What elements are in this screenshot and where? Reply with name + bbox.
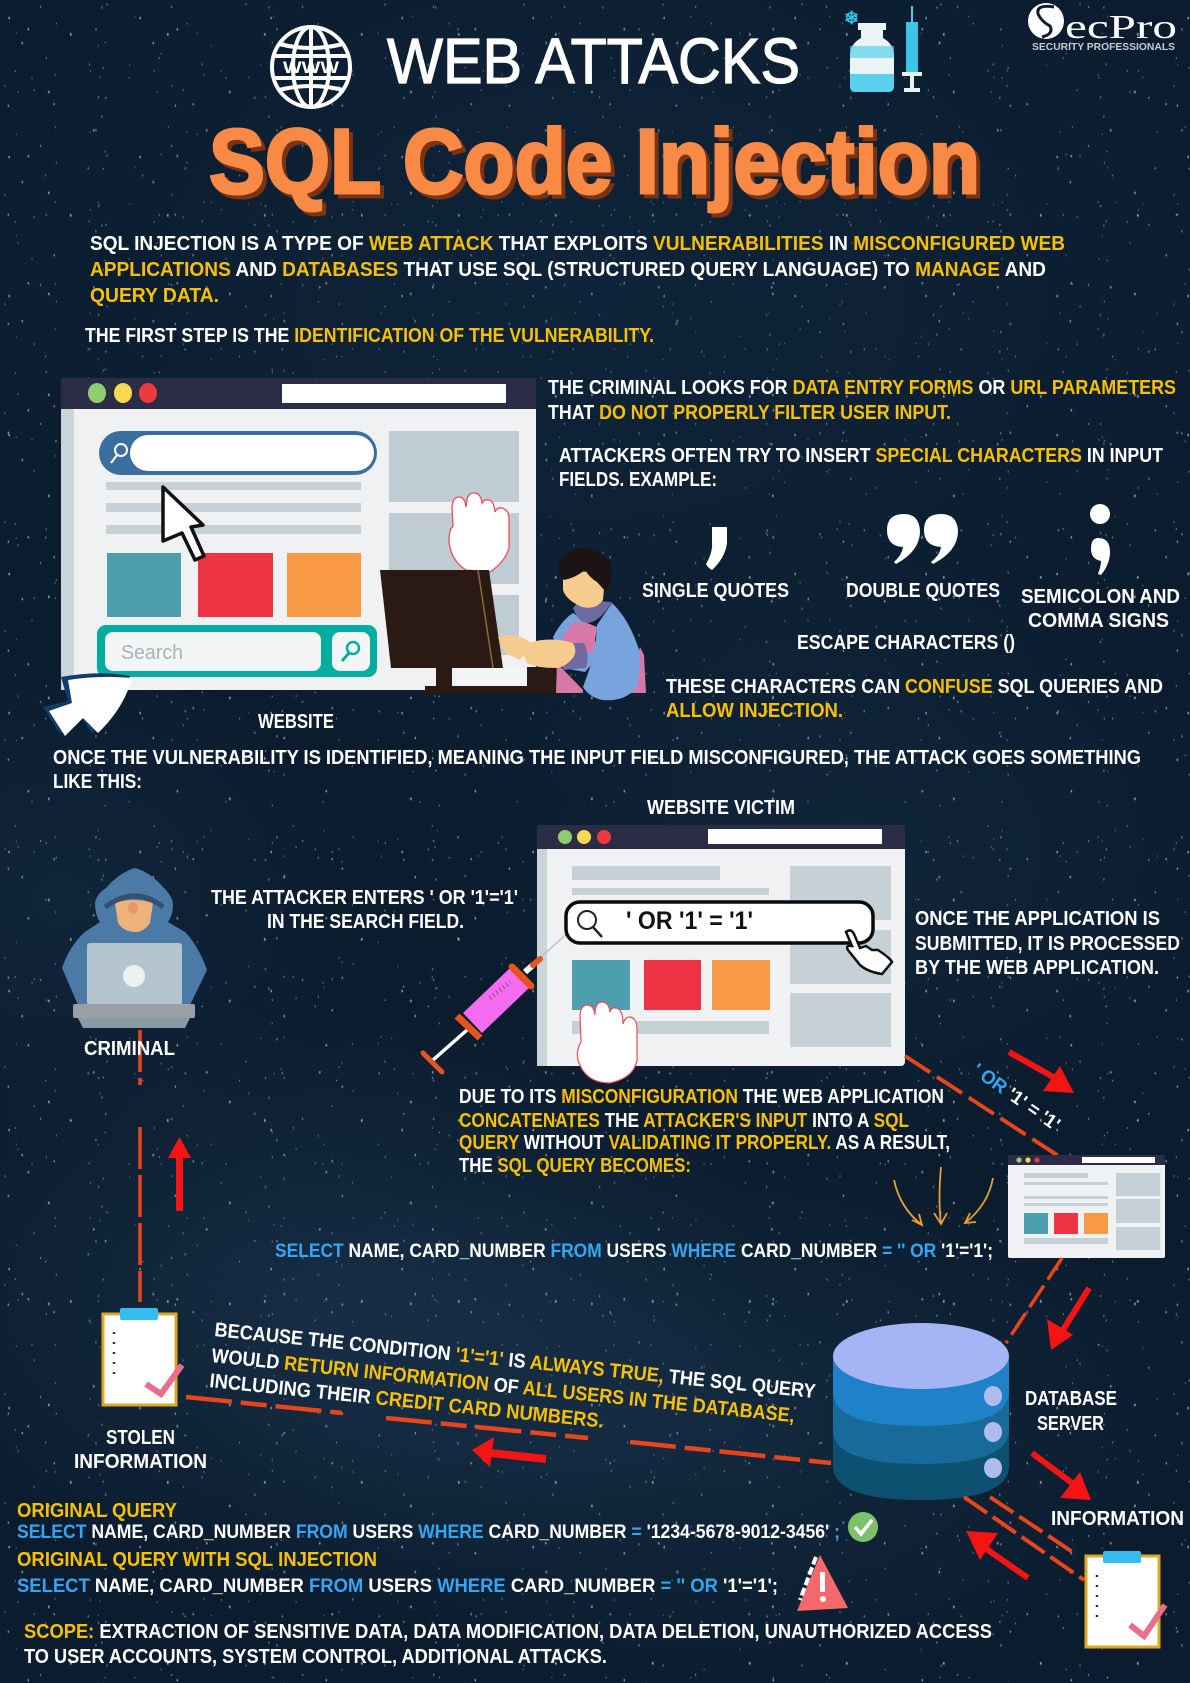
icon: white fang shape [43,673,132,736]
text block: once vulnerability identified: LIKE THIS: [53,771,142,793]
text block: intro: QUERY DATA. [90,285,219,307]
logo: SecPro [1028,3,1177,53]
text: original query [17,1500,840,1543]
connector: dashed line criminal to stolen info [138,1030,142,1302]
icon: vial and syringe [844,6,922,92]
teal search box [97,625,377,677]
text block: confuse SQL: THESE CHARACTERS CAN CONFUSE SQL QUERIES AND [666,676,1163,698]
text: misconfiguration: CONCATENATES THE ATTACKER'S INPUT INTO A SQL [459,1110,909,1132]
text block: attackers insert characters: ATTACKERS OFTEN TRY TO INSERT SPECIAL CHARACTERS IN INPUT [559,445,1163,467]
label: semicolon and comma signs [1021,586,1180,632]
text: condition always true: WOULD RETURN INFORMATION OF ALL USERS IN THE DATABASE, [210,1345,796,1427]
connector: dashed lines database to information [964,1497,1084,1580]
text: misconfiguration: DUE TO ITS MISCONFIGURATION THE WEB APPLICATION [459,1086,944,1108]
text: injected query [17,1549,778,1597]
icon: warning triangle [797,1555,848,1611]
text: injected query: ORIGINAL QUERY WITH SQL INJECTION [17,1549,377,1571]
arrow: red up left [966,1531,1028,1578]
monitor [380,570,565,694]
text: misconfiguration [459,1086,950,1177]
label: database server: DATABASE [1025,1388,1117,1410]
text block: confuse SQL [666,676,1163,722]
text: condition always true: BECAUSE THE CONDITION '1'='1' IS ALWAYS TRUE, THE SQL QUERY [213,1319,817,1403]
arrow: red down right [1009,1052,1074,1093]
text block: scope: SCOPE: EXTRACTION OF SENSITIVE DATA, DATA MODIFICATION, DATA DELETION, UNAUTHORIZED ACCESS [24,1621,992,1643]
arrow: red down right to information [1032,1453,1091,1500]
arrow: red up [168,1137,191,1211]
text: first step: THE FIRST STEP IS THE IDENTIFICATION OF THE VULNERABILITY. [85,325,654,347]
logo: SecPro: SECURITY PROFESSIONALS [1032,42,1175,53]
icon: green check [848,1512,878,1542]
text block: criminal looks: THAT DO NOT PROPERLY FILTER USER INPUT. [548,402,951,424]
connector: dashed line server to database [1006,1258,1062,1343]
icon: double quote glyph [887,514,958,564]
icon: www globe [272,27,350,107]
icon: single quote glyph [706,527,727,570]
search field with injection text: ' OR '1' = '1' [626,907,753,935]
text: original query: SELECT NAME, CARD_NUMBER FROM USERS WHERE CARD_NUMBER = '1234-5678-9012-3456' ; [17,1522,840,1543]
icon: syringe [423,928,573,1072]
illustration: small browser window [1008,1155,1165,1258]
icon: database server [833,1323,1009,1500]
text block: criminal looks [548,377,1176,424]
label: criminal: CRIMINAL [84,1038,175,1060]
text: once submitted: ONCE THE APPLICATION IS [915,908,1160,930]
label: stolen information [74,1427,207,1473]
text block: scope: TO USER ACCOUNTS, SYSTEM CONTROL, ADDITIONAL ATTACKS. [24,1646,607,1668]
text block: intro [90,233,1065,307]
text: misconfiguration: THE SQL QUERY BECOMES: [459,1155,691,1177]
label: stolen information: INFORMATION [74,1451,207,1473]
text: condition always true: INCLUDING THEIR CREDIT CARD NUMBERS. [208,1370,605,1433]
icon: information clipboard [1086,1551,1165,1647]
label: information: INFORMATION [1051,1508,1184,1530]
label: semicolon and comma signs: SEMICOLON AND [1021,586,1180,608]
label: escape characters: ESCAPE CHARACTERS () [797,632,1015,654]
title: SQL Code Injection: SQL Code Injection [209,111,980,213]
icon: orange pointer arrows [894,1167,993,1225]
illustration: person at computer [380,548,646,700]
arrow: red down left [1047,1288,1089,1350]
text: injected query: SELECT NAME, CARD_NUMBER FROM USERS WHERE CARD_NUMBER = '' OR '1'='1'; [17,1576,778,1597]
label: database server [1025,1388,1117,1435]
icon: pointing hand cursor [846,930,892,974]
text block: attackers insert characters [559,445,1163,491]
icon: vial and syringe: ❄ [844,8,859,28]
label: stolen information: STOLEN [106,1427,175,1449]
label: website victim: WEBSITE VICTIM [647,797,795,819]
label: website: WEBSITE [258,711,334,733]
text block: intro: SQL INJECTION IS A TYPE OF WEB ATTACK THAT EXPLOITS VULNERABILITIES IN MISCONFIGURED WEB [90,233,1065,255]
label: double quotes: DOUBLE QUOTES [846,580,1000,602]
icon: white hand [449,493,509,572]
text: resulting SQL query: SELECT NAME, CARD_NUMBER FROM USERS WHERE CARD_NUMBER = '' OR '1'='1'; [275,1241,993,1262]
icon: semicolon glyph [1090,504,1110,575]
teal search box: Search [121,642,183,664]
text block: confuse SQL: ALLOW INJECTION. [666,700,843,722]
text block: once vulnerability identified [53,747,1141,793]
text block: attackers insert characters: FIELDS. EXAMPLE: [559,469,717,491]
label: database server: SERVER [1037,1413,1104,1435]
title: SQL Code Injection: SQL Code Injection [213,115,984,217]
label: single quotes: SINGLE QUOTES [642,580,789,602]
icon: white hand 2 [577,1002,637,1083]
text block: intro: APPLICATIONS AND DATABASES THAT USE SQL (STRUCTURED QUERY LANGUAGE) TO MANAGE AND [90,259,1046,281]
search bar [99,431,377,475]
text: attacker enters: THE ATTACKER ENTERS ' OR '1'='1' [211,887,518,909]
text: attacker enters [211,887,518,933]
text: misconfiguration: QUERY WITHOUT VALIDATING IT PROPERLY. AS A RESULT, [459,1132,950,1154]
text: attacker enters: IN THE SEARCH FIELD. [267,911,464,933]
illustration: victim browser window [537,825,905,1066]
connector: dashed line database to stolen information [186,1397,831,1463]
label: semicolon and comma signs: COMMA SIGNS [1028,610,1169,632]
rotated payload text: ' OR '1' = '1' [968,1060,1064,1136]
connector: dashed line web app to server [905,1056,1060,1157]
icon: hooded criminal with laptop [62,868,207,1028]
text: once submitted [915,908,1180,979]
arrow: red left [472,1437,546,1467]
search field with injection text [566,902,873,943]
icon: cursor arrow [163,487,204,560]
icon: stolen information clipboard [103,1308,182,1405]
text: once submitted: BY THE WEB APPLICATION. [915,957,1159,979]
logo: SecPro: ecPro [1065,9,1177,46]
illustration: website browser window [61,378,536,690]
text block: criminal looks: THE CRIMINAL LOOKS FOR DATA ENTRY FORMS OR URL PARAMETERS [548,377,1176,399]
text block: scope [24,1621,992,1668]
text: original query: ORIGINAL QUERY [17,1500,178,1522]
icon: www globe: WWW [283,58,340,77]
title: web attacks: WEB ATTACKS [387,25,800,97]
